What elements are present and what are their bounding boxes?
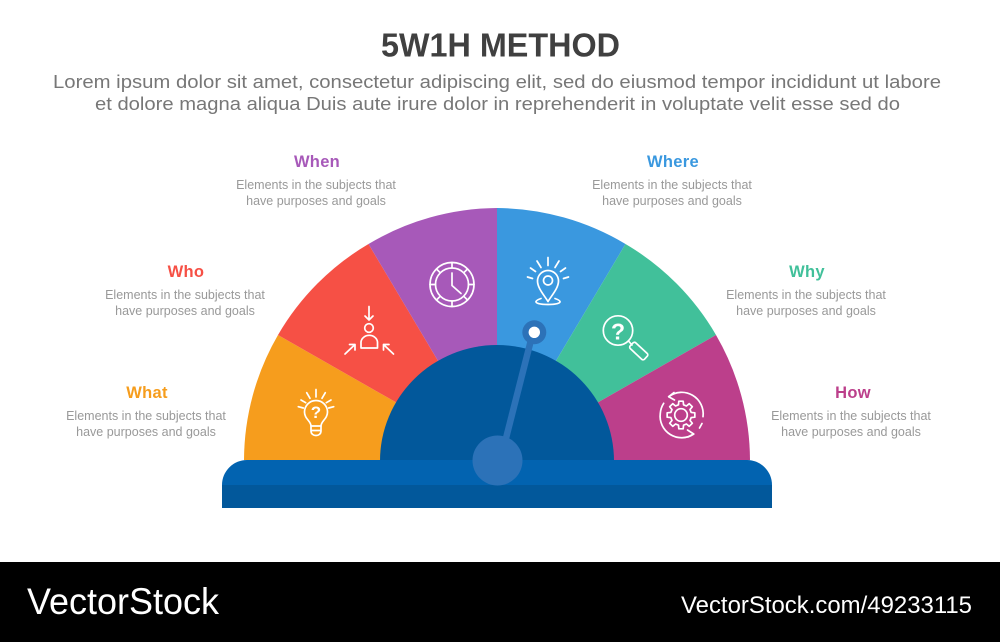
segment: Who xyxy=(278,244,497,460)
icon: magnifying glass with question mark xyxy=(603,316,649,361)
segment: Why xyxy=(497,244,716,460)
label: Why: Why xyxy=(789,263,825,281)
subtitle text: Lorem ipsum dolor sit amet, consectetur adipiscing elit, sed do eiusmod tempor incididunt ut labore xyxy=(53,71,941,92)
label: Where: Where xyxy=(647,153,699,171)
icon: magnifying glass with question mark: ? xyxy=(611,318,625,344)
label: When: have purposes and goals xyxy=(246,194,386,208)
icon: location pin xyxy=(528,258,568,304)
icon: light bulb with question mark xyxy=(298,390,334,436)
gauge needle xyxy=(472,320,546,486)
label: What: Elements in the subjects that xyxy=(66,409,226,423)
label: Why xyxy=(726,263,886,318)
label: Where xyxy=(592,153,752,208)
icon: person with arrows xyxy=(345,306,394,354)
segment: Where xyxy=(497,208,626,460)
label: How: Elements in the subjects that xyxy=(771,409,931,423)
segment: When xyxy=(368,208,497,460)
label: Who: Who xyxy=(168,263,204,281)
base plate xyxy=(222,460,772,508)
subtitle text: et dolore magna aliqua Duis aute irure dolor in reprehenderit in voluptate velit esse sed do xyxy=(95,93,900,114)
icon: gear with circular arrows xyxy=(660,392,703,438)
segment: How xyxy=(497,335,750,460)
label: Who xyxy=(105,263,265,318)
watermark band: VectorStock.com/49233115 xyxy=(681,592,972,619)
segment: What xyxy=(244,335,497,460)
watermark band xyxy=(0,562,1000,642)
label: What: What xyxy=(126,384,168,402)
label: What: have purposes and goals xyxy=(76,425,216,439)
label: Where: Elements in the subjects that xyxy=(592,178,752,192)
label: Where: have purposes and goals xyxy=(602,194,742,208)
label: Why: Elements in the subjects that xyxy=(726,288,886,302)
label: How: How xyxy=(835,384,871,402)
inner dial dome xyxy=(380,345,614,461)
title: 5W1H METHOD xyxy=(381,26,620,64)
label: Who: Elements in the subjects that xyxy=(105,288,265,302)
label: When: Elements in the subjects that xyxy=(236,178,396,192)
icon: clock xyxy=(430,262,474,306)
watermark band: VectorStock xyxy=(27,581,219,622)
label: Why: have purposes and goals xyxy=(736,304,876,318)
label: How: have purposes and goals xyxy=(781,425,921,439)
label: When xyxy=(236,153,396,208)
label: When: When xyxy=(294,153,340,171)
subtitle text xyxy=(53,71,941,114)
label: Who: have purposes and goals xyxy=(115,304,255,318)
icon: light bulb with question mark: ? xyxy=(311,403,321,422)
label: What xyxy=(66,384,226,439)
label: How xyxy=(771,384,931,439)
